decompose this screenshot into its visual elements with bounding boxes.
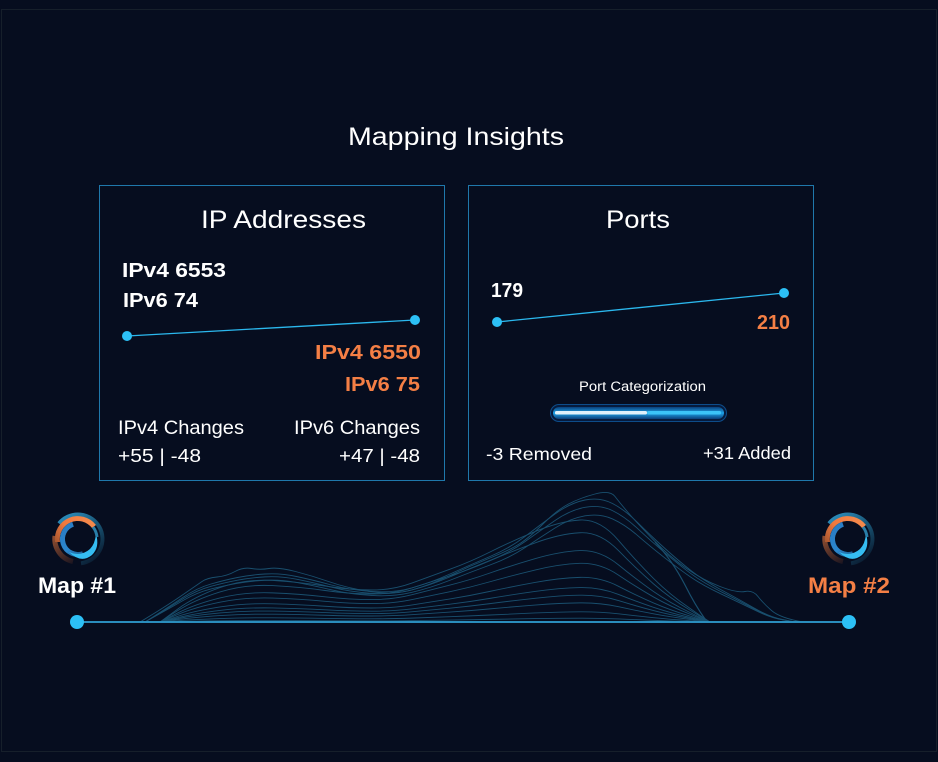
removed count: -3 Removed [486, 444, 592, 464]
label: Map #2: Map #2 [808, 573, 890, 598]
heading: IP Addresses: IP Addresses [201, 206, 366, 234]
timeline [70, 615, 856, 629]
progress bar [550, 404, 726, 422]
panel: ports [468, 186, 814, 480]
Map 2 IP counts: IPv6 75 [345, 374, 420, 396]
heading: Ports: Ports [606, 206, 670, 234]
Map 1 IP counts: IPv4 6553 [122, 260, 226, 282]
port trend line [492, 288, 789, 327]
IPv4 changes [118, 418, 244, 466]
IPv4 changes: IPv4 Changes [118, 418, 244, 439]
contour mountain chart [140, 492, 803, 622]
Map 1 port count: 179 [491, 280, 523, 302]
IPv6 changes: +47 | -48 [339, 446, 420, 466]
Map 1 IP counts: IPv6 74 [123, 290, 199, 312]
icon: map 2 ring [825, 514, 872, 563]
Map 1 IP counts [122, 260, 226, 312]
Map 2 port count: 210 [757, 312, 790, 334]
Map 2 IP counts: IPv4 6550 [315, 342, 421, 364]
added count: +31 Added [703, 443, 791, 463]
IP trend line [122, 315, 420, 341]
panel: IP addresses [100, 186, 444, 480]
label: Map #1: Map #1 [38, 573, 116, 598]
IPv6 changes [294, 418, 420, 466]
IPv4 changes: +55 | -48 [118, 446, 201, 466]
icon: map 1 ring [55, 514, 102, 563]
IPv6 changes: IPv6 Changes [294, 418, 420, 439]
title: Mapping Insights [348, 123, 564, 151]
label: port categorization: Port Categorization [579, 379, 706, 394]
Map 2 IP counts [315, 342, 421, 396]
